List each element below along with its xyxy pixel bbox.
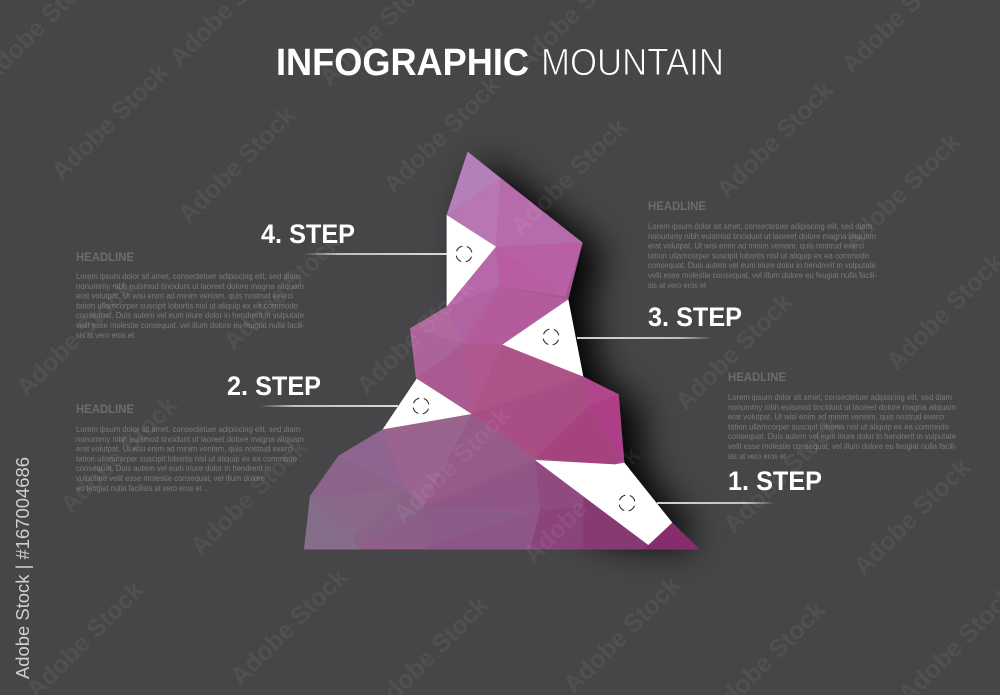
text block: right upper: velit esse molestie consequat, vel illum dolore eu feugiat nulla facili- bbox=[648, 270, 877, 280]
stock watermark pattern: Adobe Stock bbox=[225, 563, 353, 691]
step 4 label: 4. STEP bbox=[261, 219, 355, 249]
text block: right lower: velit esse molestie consequat, vel illum dolore eu feugiat nulla facili- bbox=[728, 441, 957, 451]
text block: left lower: erat volutpat. Ut wisi enim ad minim veniam, quis nostrud exerci bbox=[76, 444, 293, 454]
text block: right lower: Lorem ipsum dolor sit amet, consectetuer adipiscing elit, sed diam bbox=[728, 392, 952, 402]
icon: dashed circle step 3 bbox=[541, 327, 561, 347]
stock watermark pattern: Adobe Stock bbox=[46, 58, 174, 186]
text block: left upper: tation ullamcorper suscipit lobortis nisl ut aliquip ex ea commodo bbox=[76, 300, 298, 310]
text block: right lower: erat volutpat. Ut wisi enim ad minim veniam, quis nostrud exerci bbox=[728, 412, 944, 422]
text block: left upper: velit esse molestie consequat, vel illum dolore eu feugiat nulla facili- bbox=[76, 320, 305, 330]
stock watermark pattern: Adobe Stock bbox=[848, 453, 976, 581]
text block: right upper: tation ullamcorper suscipit lobortis nisl ut aliquip ex ea commodo bbox=[648, 250, 869, 260]
text block: left upper: sis at vero eros et bbox=[76, 330, 135, 340]
mountain shadow bbox=[466, 160, 692, 548]
text block: right upper: sis at vero eros et bbox=[648, 280, 707, 290]
text block: left upper: Lorem ipsum dolor sit amet, consectetuer adipiscing elit, sed diam bbox=[76, 271, 300, 281]
icon: dashed circle step 4 bbox=[454, 244, 474, 264]
stock watermark pattern: Adobe Stock bbox=[55, 391, 183, 519]
text block: left lower: consequat. Duis autem vel eum iriure dolor in hendrerit in bbox=[76, 463, 271, 473]
title: MOUNTAIN bbox=[541, 42, 724, 84]
stock watermark pattern: Adobe Stock bbox=[173, 101, 301, 229]
white panel: step 4 bbox=[447, 215, 496, 307]
text block: right upper: Lorem ipsum dolor sit amet, consectetuer adipiscing elit, sed diam bbox=[648, 221, 872, 231]
stock watermark pattern: Adobe Stock bbox=[218, 228, 346, 356]
stock watermark pattern: Adobe Stock bbox=[838, 128, 966, 256]
text block: right upper: HEADLINE bbox=[648, 201, 706, 213]
white panel: step 1 bbox=[535, 460, 672, 545]
stock watermark pattern: Adobe Stock bbox=[351, 272, 479, 400]
title bbox=[276, 42, 724, 84]
step 1 label: 1. STEP bbox=[728, 466, 822, 496]
text block: left upper bbox=[76, 252, 305, 340]
text block: left lower: tation ullamcorper suscipit lobortis nisl ut aliquip ex ea commodo bbox=[76, 453, 297, 463]
text block: left upper: nonummy nibh euismod tincidunt ut laoreet dolore magna aliquam bbox=[76, 281, 304, 291]
text block: left lower bbox=[76, 404, 304, 493]
white panel: step 2 bbox=[383, 379, 472, 429]
text block: left lower: Lorem ipsum dolor sit amet, consectetuer adipiscing elit, sed diam bbox=[76, 424, 300, 434]
step 3 label: 3. STEP bbox=[648, 302, 742, 332]
text block: left lower: vulputate velit esse molestie consequat, vel illum dolore bbox=[76, 473, 265, 483]
text block: right lower bbox=[728, 372, 957, 461]
text block: right upper bbox=[648, 201, 877, 290]
text block: right upper: consequat. Duis autem vel eum iriure dolor in hendrerit in vulputate bbox=[648, 260, 876, 270]
text block: right upper: nonummy nibh euismod tincidunt ut laoreet dolore magna aliquam bbox=[648, 231, 876, 241]
stock id side text: Adobe Stock | #167004686 bbox=[13, 457, 33, 679]
stock watermark pattern: Adobe Stock bbox=[388, 401, 516, 529]
text block: right lower: nonummy nibh euismod tincidunt ut laoreet dolore magna aliquam bbox=[728, 402, 956, 412]
text block: left lower: eu feugiat nulla facilisis at vero eros et ... bbox=[76, 483, 210, 493]
mountain bbox=[304, 152, 699, 549]
stock watermark pattern: Adobe Stock bbox=[11, 274, 139, 402]
title: INFOGRAPHIC bbox=[276, 42, 529, 84]
text block: left upper: HEADLINE bbox=[76, 252, 134, 264]
text block: right lower: HEADLINE bbox=[728, 372, 786, 384]
text block: left lower: nonummy nibh euismod tincidunt ut laoreet dolore magna aliquam bbox=[76, 434, 304, 444]
stock watermark pattern: Adobe Stock bbox=[518, 441, 646, 569]
icon: dashed circle step 1 bbox=[617, 493, 637, 513]
text block: right lower: tation ullamcorper suscipit lobortis nisl ut aliquip ex ea commodo bbox=[728, 421, 949, 431]
stock watermark pattern: Adobe Stock bbox=[378, 71, 506, 199]
text block: right upper: erat volutpat. Ut wisi enim ad minim veniam, quis nostrud exerci bbox=[648, 241, 864, 251]
stock watermark pattern: Adobe Stock bbox=[505, 113, 633, 241]
step 2 label: 2. STEP bbox=[227, 371, 321, 401]
white panel: step 3 bbox=[502, 299, 583, 377]
icon: dashed circle step 2 bbox=[411, 396, 431, 416]
text block: right lower: consequat. Duis autem vel eum iriure dolor in hendrerit in vulputate bbox=[728, 431, 956, 441]
text block: left upper: consequat. Duis autem vel eum iriure dolor in hendrerit in vulputate bbox=[76, 310, 304, 320]
stock watermark pattern: Adobe Stock bbox=[670, 288, 798, 416]
text block: left lower: HEADLINE bbox=[76, 404, 134, 416]
text block: right lower: sis at vero eros et bbox=[728, 451, 787, 461]
stock watermark pattern: Adobe Stock bbox=[185, 433, 313, 561]
stock watermark pattern: Adobe Stock bbox=[711, 76, 839, 204]
stock watermark pattern: Adobe Stock bbox=[718, 411, 846, 539]
text block: left upper: erat volutpat. Ut wisi enim ad minim veniam, quis nostrud exerci bbox=[76, 291, 293, 301]
